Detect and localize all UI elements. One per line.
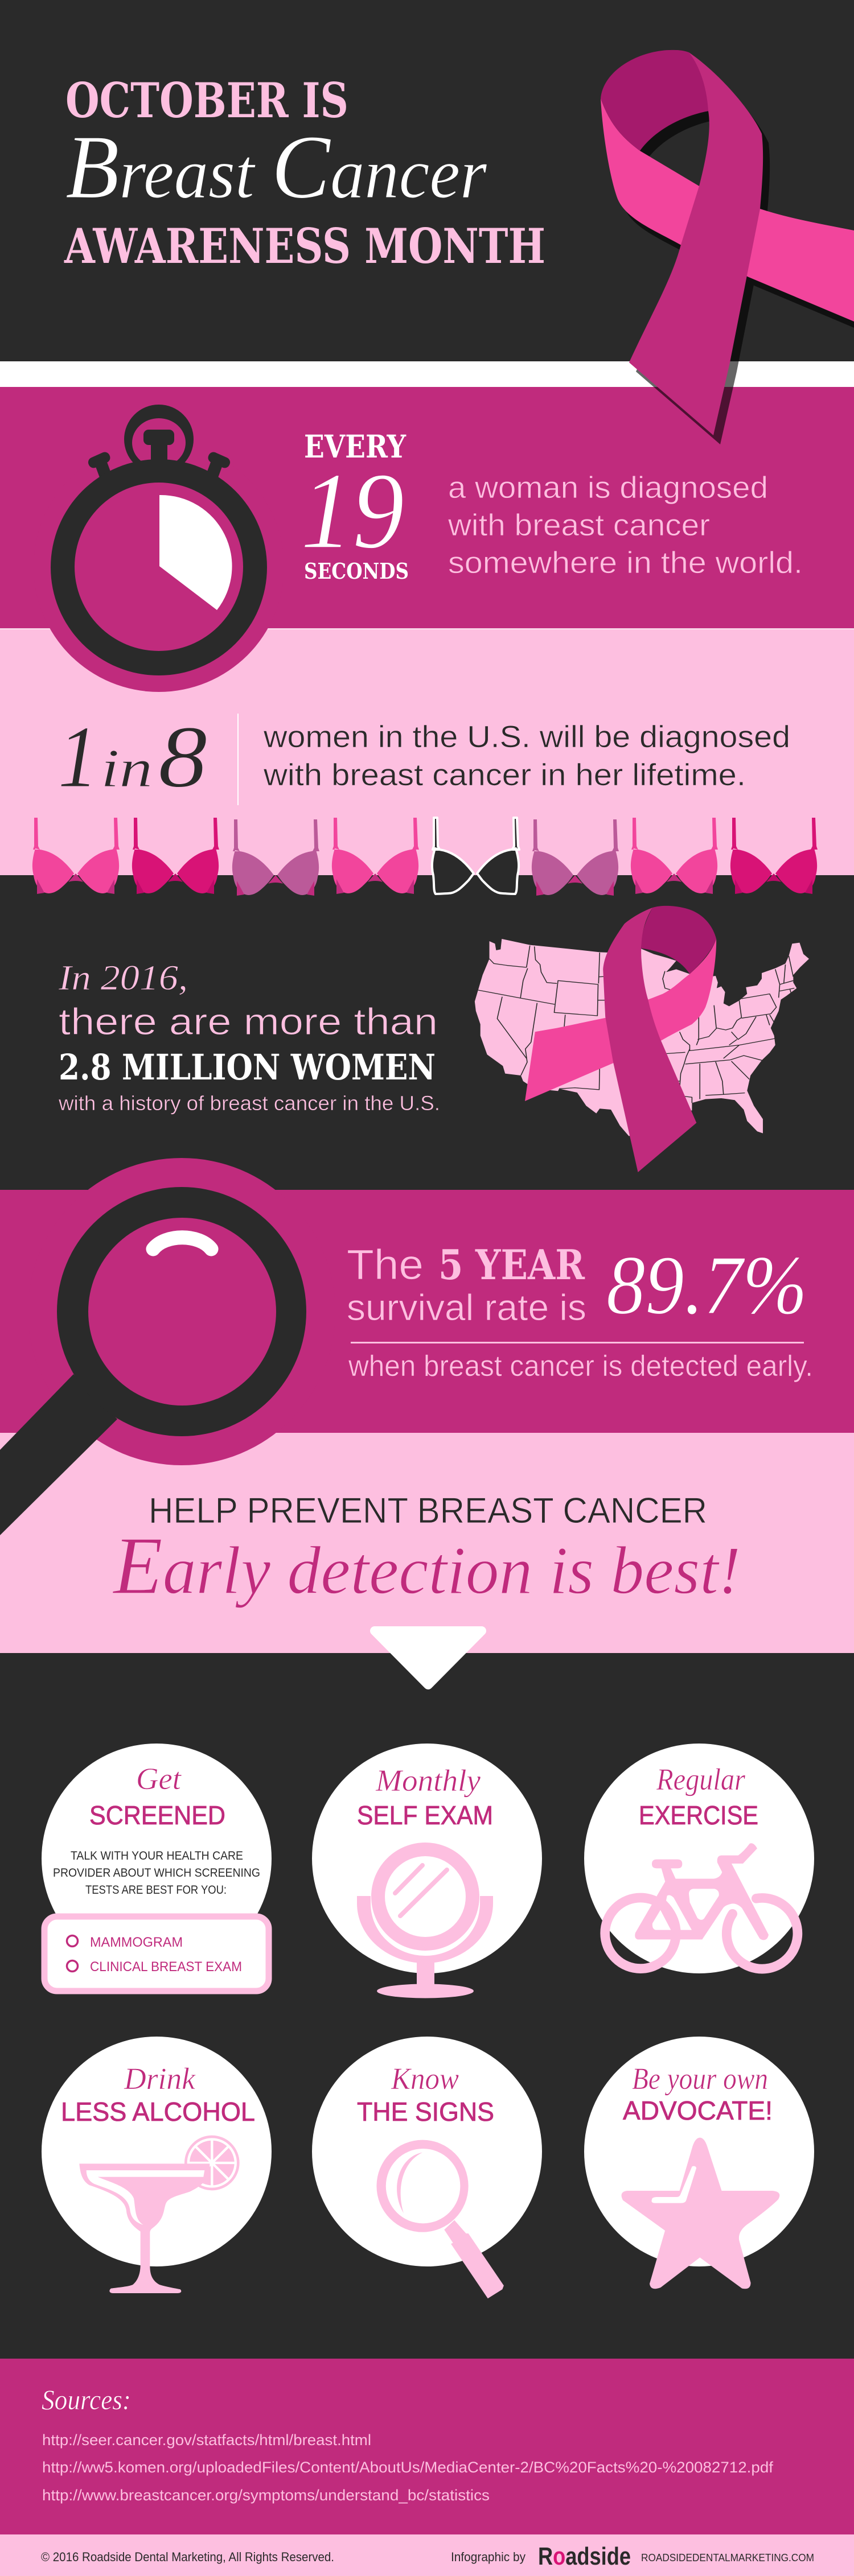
title: OCTOBER IS (65, 72, 348, 129)
text: 1 in 8: in (101, 738, 153, 798)
panel: get screened: SCREENED (89, 1800, 225, 1830)
icon: large awareness ribbon (601, 50, 854, 444)
text: in 2016 statistic (58, 959, 440, 1115)
text: five year survival rate (347, 1239, 813, 1383)
panel: drink less alcohol: Drink (124, 2062, 196, 2096)
icon: mirror (357, 1843, 493, 1998)
panel: drink less alcohol: LESS ALCOHOL (61, 2097, 255, 2126)
panel: get screened (42, 1744, 272, 1991)
panel: regular exercise (584, 1744, 814, 1973)
arrow: white triangle (375, 1631, 482, 1685)
panel: be your own advocate: Be your own (632, 2062, 768, 2096)
text: 1 in 8: 8 (158, 708, 207, 806)
panel: monthly self exam (312, 1744, 542, 1998)
text: a woman is diagnosed: a woman is diagnosed (448, 471, 768, 505)
panel: monthly self exam: Monthly (375, 1763, 481, 1798)
text: every 19 seconds: SECONDS (304, 558, 409, 584)
text: in 2016 statistic: In 2016, (58, 959, 188, 998)
icon: cocktail glass (79, 2137, 238, 2293)
panel: drink less alcohol (42, 2037, 272, 2293)
title: Breast Cancer (65, 116, 487, 217)
footer (41, 2542, 814, 2570)
panel: get screened: CLINICAL BREAST EXAM (90, 1959, 242, 1975)
text: five year survival rate: 5 YEAR (438, 1240, 585, 1289)
text: women in the US: with breast cancer in her lifetime. (263, 758, 746, 792)
text: a woman is diagnosed (447, 471, 803, 580)
title (64, 72, 545, 274)
panel: get screened: Get (136, 1762, 182, 1796)
panel: sources: http://www.breastcancer.org/symptoms/understand_bc/statistics (42, 2487, 490, 2504)
panel: get screened: TALK WITH YOUR HEALTH CARE (71, 1849, 243, 1862)
panel: monthly self exam: SELF EXAM (357, 1800, 493, 1830)
heading: help prevent breast cancer: Early detection is best! (112, 1520, 741, 1611)
heading: help prevent breast cancer: HELP PREVENT BREAST CANCER (149, 1491, 707, 1531)
icon: magnifying glass (0, 1158, 335, 1535)
footer: © 2016 Roadside Dental Marketing, All Rights Reserved. (41, 2550, 334, 2564)
text: women in the US (263, 720, 790, 792)
panel: be your own advocate (584, 2037, 814, 2289)
panel: be your own advocate: ADVOCATE! (623, 2096, 773, 2125)
text: a woman is diagnosed: somewhere in the world. (448, 546, 803, 580)
text: five year survival rate: when breast cancer is detected early. (348, 1350, 813, 1383)
panel: get screened: MAMMOGRAM (90, 1935, 183, 1950)
text: every 19 seconds: 19 (301, 450, 404, 571)
text: every 19 seconds: EVERY (304, 428, 407, 465)
text: 1 in 8: 1 (58, 708, 98, 806)
panel: get screened: PROVIDER ABOUT WHICH SCREENING (53, 1866, 260, 1880)
panel: know the signs (312, 2037, 542, 2298)
text: 1 in 8 (58, 708, 207, 806)
chart: eight bras, one in eight highlighted (32, 818, 818, 896)
icon: ribbon over map (525, 906, 716, 1172)
panel: get screened: TESTS ARE BEST FOR YOU: (85, 1883, 227, 1897)
panel: regular exercise: EXERCISE (639, 1800, 758, 1830)
footer: Roadside (538, 2542, 631, 2570)
icon: star (622, 2138, 779, 2289)
footer: Infographic by (451, 2550, 525, 2564)
text: five year survival rate: The (347, 1241, 424, 1288)
icon: bicycle (605, 1843, 798, 1969)
icon: stopwatch (34, 405, 284, 692)
panel: sources: http://ww5.komen.org/uploadedFiles/Content/AboutUs/MediaCenter-2/BC%20Facts%20-%20082712.pdf (42, 2459, 774, 2476)
panel: know the signs: Know (391, 2062, 459, 2096)
panel: know the signs: THE SIGNS (357, 2097, 494, 2126)
panel: sources (42, 2384, 774, 2504)
text: in 2016 statistic: there are more than (59, 1000, 438, 1042)
text: five year survival rate: 89.7% (606, 1239, 807, 1332)
text: in 2016 statistic: 2.8 MILLION WOMEN (59, 1046, 436, 1088)
panel: sources: Sources: (42, 2384, 131, 2416)
text: a woman is diagnosed: with breast cancer (447, 508, 710, 542)
text: five year survival rate: survival rate is (347, 1287, 586, 1328)
title: AWARENESS MONTH (64, 218, 545, 274)
map: United States (475, 939, 809, 1136)
panel: sources: http://seer.cancer.gov/statfacts/html/breast.html (42, 2431, 371, 2449)
text: women in the US: women in the U.S. will be diagnosed (263, 720, 790, 754)
footer: ROADSIDEDENTALMARKETING.COM (641, 2552, 814, 2563)
panel: regular exercise: Regular (656, 1762, 746, 1796)
icon: small magnifier (376, 2140, 504, 2298)
text: in 2016 statistic: with a history of breast cancer in the U.S. (58, 1091, 440, 1115)
